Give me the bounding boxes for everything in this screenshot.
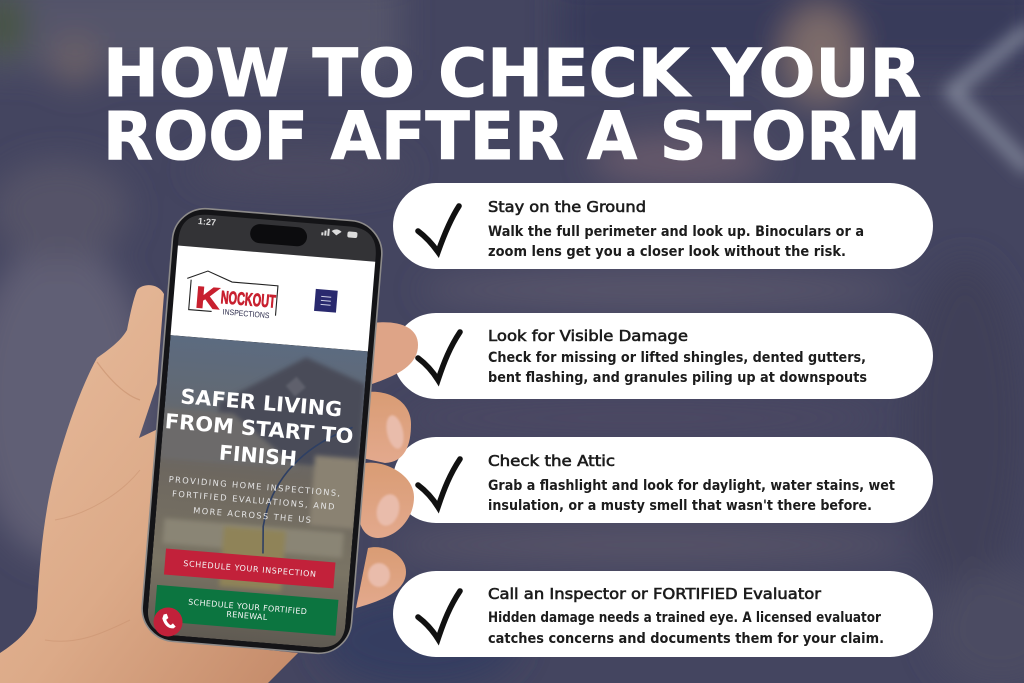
hand holding phone — [0, 285, 418, 683]
website header — [171, 245, 375, 351]
card 4: call an inspector — [393, 571, 933, 657]
checkmark — [418, 206, 459, 252]
finger 4 — [356, 547, 406, 608]
body: bent flashing, and granules piling up at downspouts — [488, 370, 867, 386]
logo — [184, 269, 279, 321]
card 1: stay on the ground — [393, 183, 933, 269]
checkmark — [418, 459, 460, 507]
thumb crease — [97, 362, 140, 400]
body — [488, 224, 864, 260]
logo: NOCKOUT — [220, 287, 276, 312]
body: catches concerns and documents them for your claim. — [488, 631, 884, 647]
card 2: visible damage — [393, 313, 933, 399]
status bar — [178, 213, 378, 262]
body: Grab a flashlight and look for daylight, water stains, wet — [488, 478, 895, 494]
body: Walk the full perimeter and look up. Binoculars or a — [488, 224, 864, 240]
finger 3 — [360, 463, 414, 538]
heading: Stay on the Ground — [488, 199, 646, 216]
status icons — [321, 228, 358, 238]
phone — [140, 206, 384, 656]
green button: SCHEDULE YOUR FORTIFIED — [188, 598, 307, 616]
fingernails — [368, 414, 406, 587]
hero subtext: MORE ACROSS THE US — [193, 505, 311, 525]
card 3: attic — [393, 437, 933, 523]
phone body — [140, 206, 384, 656]
finger 2 — [362, 392, 411, 463]
hamburger menu button — [314, 289, 338, 313]
title: ROOF AFTER A STORM — [103, 98, 921, 175]
palm creases — [45, 470, 140, 641]
checkmark — [418, 332, 460, 380]
hero photo — [146, 335, 369, 649]
body: zoom lens get you a closer look without the risk. — [488, 244, 846, 260]
title: HOW TO CHECK YOUR — [103, 35, 921, 112]
red button — [164, 549, 335, 588]
hero headline: SAFER LIVING — [180, 384, 343, 421]
heading: Check the Attic — [488, 453, 615, 470]
heading: Call an Inspector or FORTIFIED Evaluator — [488, 586, 822, 603]
logo: K — [194, 281, 221, 316]
green button: RENEWAL — [226, 610, 268, 622]
hero subtext: FORTIFIED EVALUATIONS, AND — [172, 488, 335, 512]
logo: INSPECTIONS — [222, 307, 270, 320]
red button: SCHEDULE YOUR INSPECTION — [183, 559, 316, 579]
hero headline: FINISH — [218, 441, 298, 471]
heading: Look for Visible Damage — [488, 328, 688, 345]
notch — [249, 223, 308, 247]
body — [488, 478, 895, 514]
body: Check for missing or lifted shingles, dented gutters, — [488, 350, 866, 366]
hero headline: FROM START TO — [164, 409, 354, 448]
hero subtext: PROVIDING HOME INSPECTIONS, — [168, 474, 341, 498]
palm and thumb — [0, 285, 298, 683]
body: Hidden damage needs a trained eye. A licensed evaluator — [488, 610, 881, 626]
phone call button — [152, 606, 184, 638]
body — [488, 350, 867, 386]
body — [488, 610, 884, 647]
hero headline — [162, 383, 356, 475]
title — [103, 35, 921, 175]
finger 1 — [372, 322, 418, 384]
body: insulation, or a musty smell that wasn't there before. — [488, 498, 872, 514]
hero subtext — [166, 474, 341, 527]
clock: 1:27 — [198, 216, 216, 228]
checkmark — [418, 591, 460, 639]
green button — [154, 585, 338, 636]
